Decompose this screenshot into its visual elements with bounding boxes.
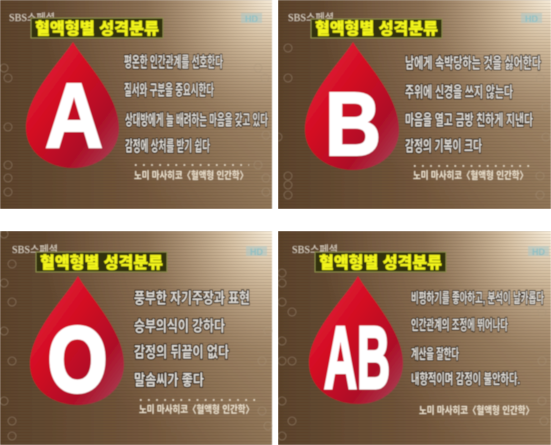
panel: blood type B [274, 0, 551, 209]
panel: blood type O: SBS스페셜 [12, 244, 58, 256]
traits list: 감정의 기복이 크다 [405, 138, 482, 155]
HD badge: HD [532, 247, 545, 257]
traits list [124, 54, 268, 155]
HD badge [528, 246, 549, 257]
traits list: 감정에 상처를 받기 쉽다 [125, 138, 210, 155]
panel: blood type A [0, 0, 272, 209]
heading: 혈액형별 성격분류 [315, 19, 438, 38]
traits list: 평온한 인간관계를 선호한다 [124, 54, 223, 71]
traits list: 질서와 구분을 중요시한다 [124, 82, 214, 99]
traits list: 풍부한 자기주장과 표현 [134, 290, 250, 307]
traits list: 말솜씨가 좋다 [134, 371, 204, 389]
icon: blood drop B: B [325, 75, 381, 175]
citation [134, 165, 249, 182]
traits list: 감정의 뒤끝이 없다 [134, 344, 229, 361]
HD badge: HD [245, 14, 258, 24]
HD badge [246, 246, 267, 257]
panel: blood type AB [278, 231, 551, 445]
traits list [405, 55, 541, 155]
icon: blood drop O: O [48, 309, 107, 411]
panel: blood type AB: SBS스페셜 [292, 244, 338, 256]
traits list: 계산을 잘한다 [411, 346, 459, 362]
HD badge [521, 13, 542, 24]
citation: 노미 마사히코〈혈액형 인간학〉 [139, 403, 254, 416]
citation [139, 400, 255, 416]
HD badge: HD [250, 247, 263, 257]
HD badge [241, 13, 262, 24]
citation: 노미 마사히코〈혈액형 인간학〉 [419, 404, 534, 417]
icon: blood drop AB: AB [324, 308, 390, 407]
icon: blood drop A [26, 42, 119, 168]
heading: 혈액형별 성격분류 [319, 253, 442, 272]
icon: blood drop O [30, 276, 124, 411]
heading: 혈액형별 성격분류 [40, 253, 163, 272]
traits list: 상대방에게 늘 배려하는 마음을 갖고 있다 [125, 112, 268, 129]
panel: blood type O [0, 230, 272, 445]
icon: blood drop A: A [45, 65, 103, 167]
citation [413, 166, 529, 182]
traits list [411, 290, 544, 387]
icon: blood drop AB [309, 276, 403, 407]
icon: blood drop B [305, 42, 399, 175]
panel: blood type A: SBS스페셜 [9, 12, 55, 24]
citation: 노미 마사히코〈혈액형 인간학〉 [413, 169, 528, 182]
traits list: 승부의식이 강하다 [134, 318, 225, 335]
citation: 노미 마사히코〈혈액형 인간학〉 [134, 169, 248, 182]
traits list [134, 290, 250, 389]
HD badge: HD [525, 14, 538, 24]
panel: blood type B: SBS스페셜 [288, 12, 334, 24]
heading: 혈액형별 성격분류 [35, 19, 159, 38]
